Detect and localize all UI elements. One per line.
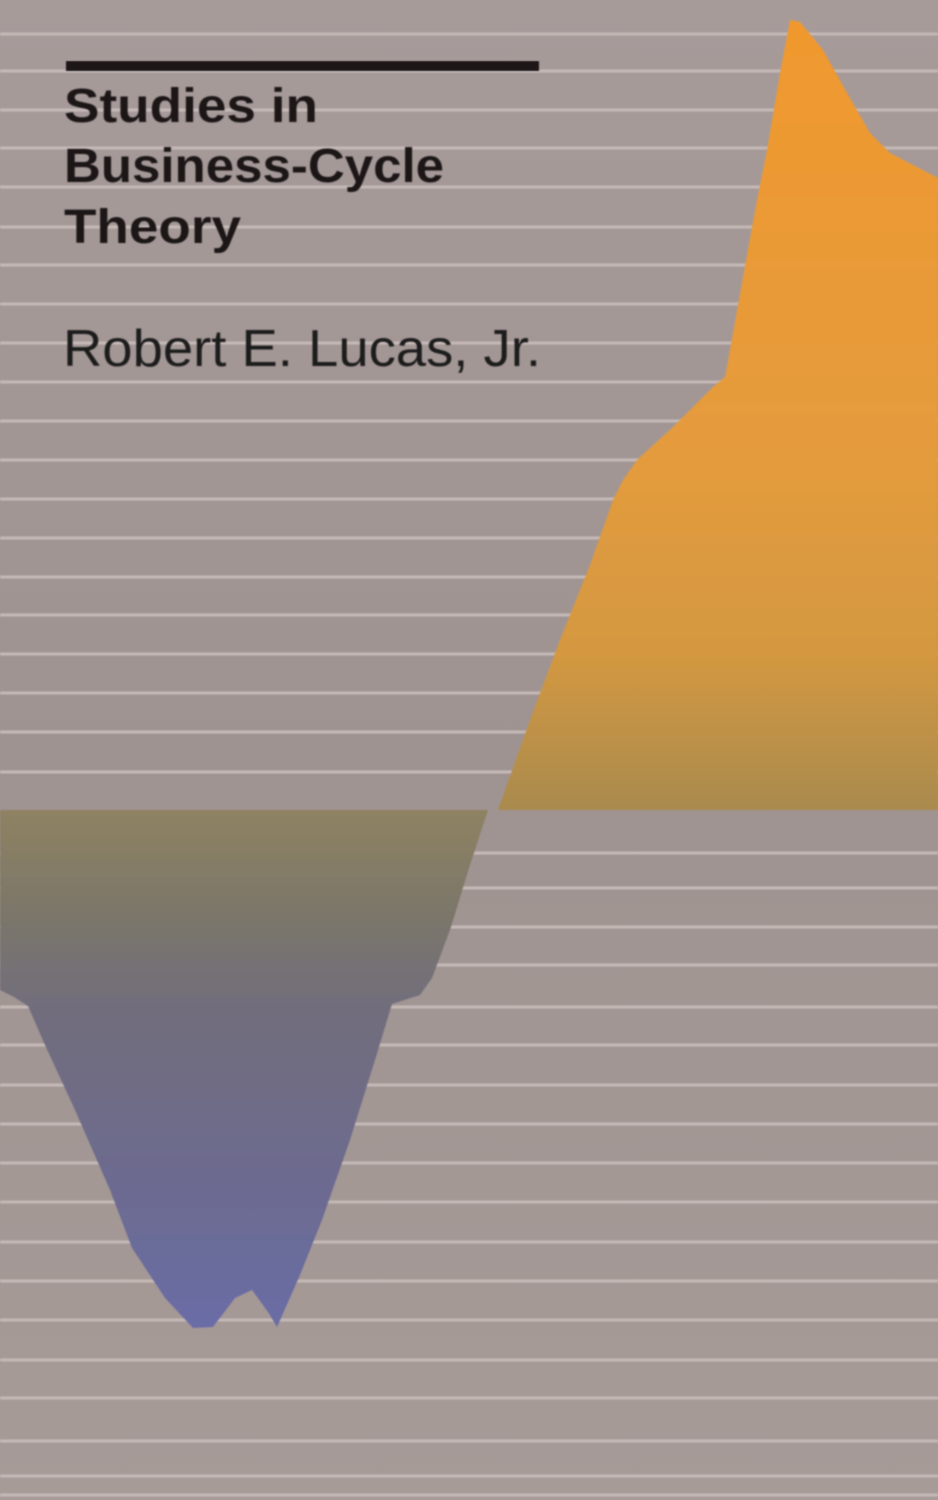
title: Studies in — [64, 80, 318, 133]
title — [64, 80, 444, 254]
title: Theory — [64, 201, 241, 254]
title rule — [66, 61, 539, 71]
chart: upper orange expansion area — [498, 20, 938, 810]
author: Robert E. Lucas, Jr. — [63, 320, 541, 378]
title: Business-Cycle — [64, 140, 444, 193]
chart: lower blue contraction area — [0, 810, 488, 1328]
